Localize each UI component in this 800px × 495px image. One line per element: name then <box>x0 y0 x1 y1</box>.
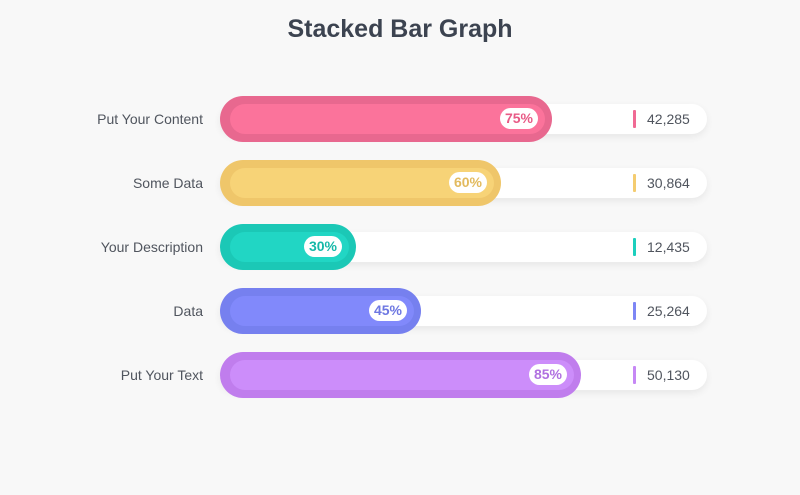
row: Your Description <box>101 224 706 270</box>
row: Put Your Content <box>97 96 706 142</box>
row: Put Your Content: 42,285 <box>647 111 690 127</box>
row: Some Data <box>133 160 706 206</box>
row: Some Data: 30,864 <box>647 175 690 191</box>
row: Some Data: Some Data <box>133 175 203 191</box>
bar 85%: 85% <box>534 366 562 382</box>
row: Data: Data <box>173 303 203 319</box>
bar 75%: 75% <box>505 110 533 126</box>
row: Put Your Text: 50,130 <box>647 367 690 383</box>
bar 30% <box>220 224 356 270</box>
bar 60%: 60% <box>454 174 482 190</box>
row: Your Description: Your Description <box>101 239 203 255</box>
row: Data <box>173 288 706 334</box>
bar 30%: 30% <box>309 238 337 254</box>
bar 60% <box>220 160 501 206</box>
row: Put Your Text <box>121 352 706 398</box>
row: Put Your Content: Put Your Content <box>97 111 203 127</box>
bar 85% <box>220 352 581 398</box>
title: Stacked Bar Graph <box>287 15 513 43</box>
bar 75% <box>220 96 552 142</box>
row: Your Description: 12,435 <box>647 239 690 255</box>
bar 45%: 45% <box>374 302 402 318</box>
row: Data: 25,264 <box>647 303 690 319</box>
row: Put Your Text: Put Your Text <box>121 367 203 383</box>
bar 45% <box>220 288 421 334</box>
